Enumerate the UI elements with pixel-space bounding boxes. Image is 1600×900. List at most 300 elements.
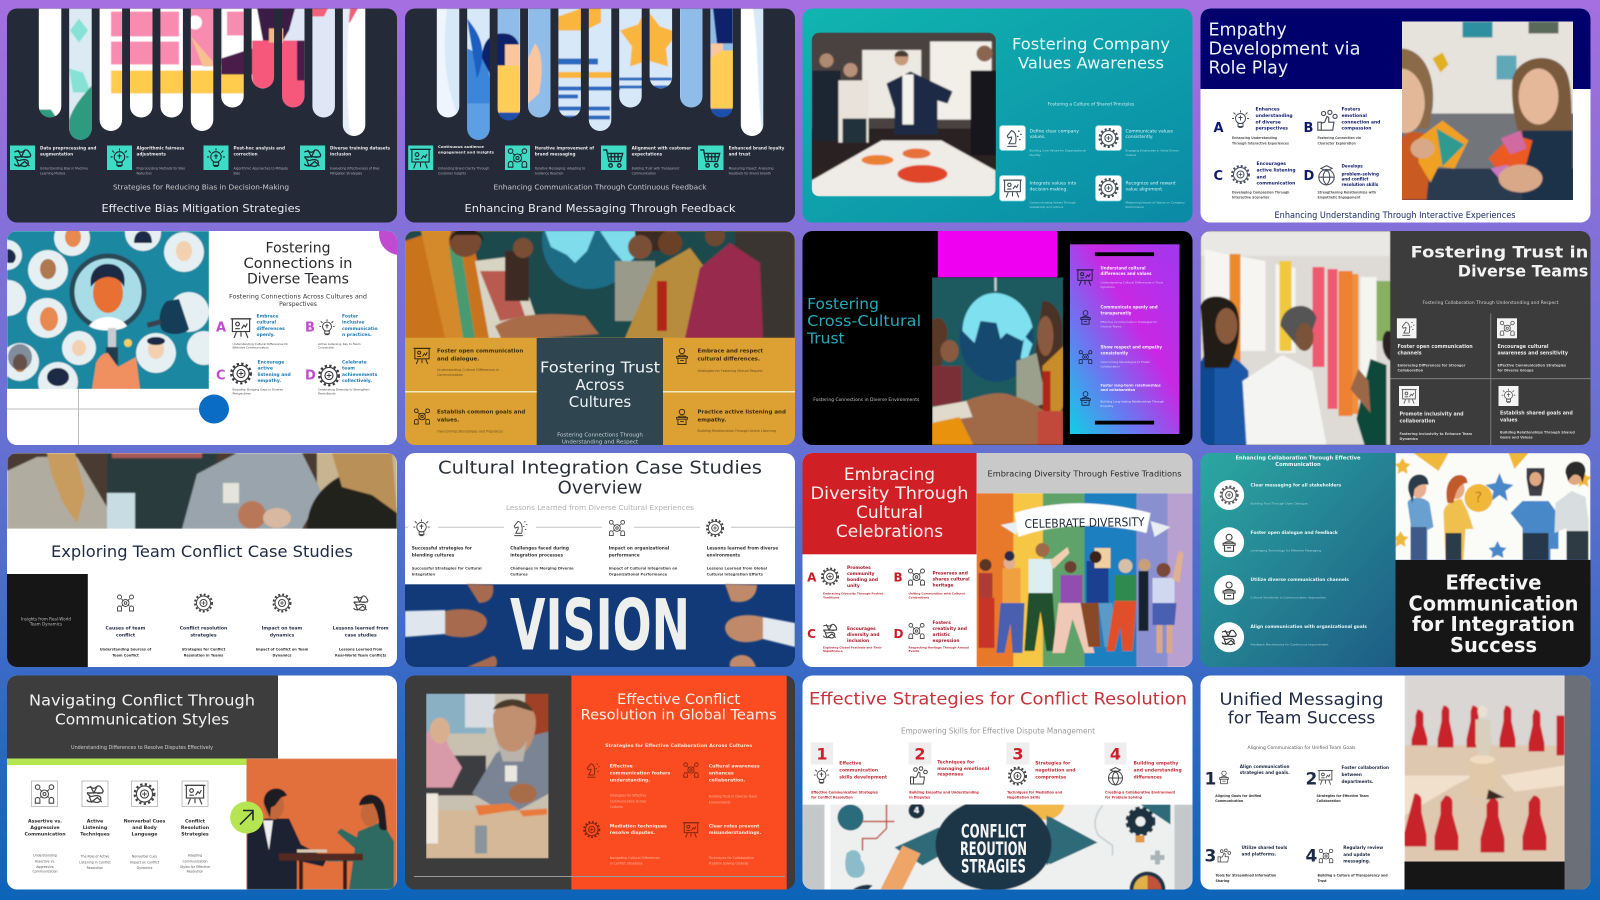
- item: resolution: strategies: [190, 632, 217, 638]
- item C: Empathy: Bridging Gaps in Diverse: [232, 388, 283, 392]
- item: respect differences: cultural differences.: [698, 357, 760, 363]
- item: nonverbal: [124, 781, 165, 870]
- item: algorithmic fairness: Preprocessing Methods for Bias: [136, 166, 185, 170]
- blue dot: [199, 394, 229, 424]
- title: Cultural: [856, 503, 923, 523]
- item: understand differences: Dynamics: [1100, 285, 1115, 289]
- item: brand loyalty: Feedback for Brand Growth: [729, 172, 771, 176]
- item: lessons: Lessons Learned from: [339, 647, 383, 651]
- icon: hub: [684, 763, 698, 777]
- item D: artistic: [932, 632, 950, 638]
- item: data preprocessing: Data preprocessing and: [40, 145, 96, 150]
- item: respect and empathy: Show respect and empathy: [1100, 344, 1162, 349]
- subtitle: Fostering Connections in Diverse Environments: [813, 397, 920, 403]
- item: lessons: Lessons learned from: [333, 625, 389, 631]
- item: diverse training: [300, 145, 391, 176]
- item A: Understanding Cultural Differences for: [232, 342, 289, 346]
- item 1: communication: [839, 767, 878, 773]
- title: Effective Bias Mitigation Strategies: [102, 202, 301, 215]
- item: respect and empathy: Collaboration: [1100, 365, 1120, 369]
- icon: cart: [700, 150, 720, 167]
- item: shared goals: values: [1500, 417, 1518, 423]
- icon: hub: [909, 623, 924, 639]
- title: Connections in: [244, 256, 352, 272]
- item 2: departments.: [1342, 778, 1374, 784]
- item 3: [1006, 742, 1076, 800]
- subtitle: Aligning Communication for Unified Team Goals: [1248, 745, 1356, 751]
- center title block: [537, 338, 663, 445]
- title: Across: [576, 376, 625, 394]
- icon: hand: [1218, 849, 1231, 862]
- item 2: managing emotional: [937, 766, 990, 772]
- item: integrate values: Communicating Values Through: [1030, 200, 1076, 204]
- item C: [1214, 160, 1296, 200]
- item D: Respecting Heritage Through Annual: [908, 646, 969, 650]
- magenta block: [938, 231, 1057, 277]
- icon: gear: [1100, 129, 1117, 147]
- striped illustration: [38, 8, 366, 140]
- item: iterative improvement: Iterative Messaging: Adapting to: [535, 166, 585, 170]
- item: challenges: Cultures: [510, 573, 529, 577]
- item: nonverbal: Nonverbal Cues: [124, 818, 165, 824]
- panel: Enhancing Brand Messaging Through Feedback: [405, 8, 795, 222]
- item: cultural awareness: Encourage cultural: [1498, 344, 1549, 350]
- item: customer expectations: Communication: [632, 172, 656, 176]
- photo: handshake and globe: [405, 231, 795, 338]
- icon: hub: [414, 409, 430, 424]
- item 2: Collaboration: [1316, 799, 1341, 803]
- item: open communication: and dialogue.: [437, 357, 479, 363]
- item: diverse channels: Cultural Sensitivity in Communication Approaches: [1250, 595, 1326, 599]
- icon: podium: [1223, 582, 1235, 599]
- item 4: Trust: [1318, 879, 1327, 883]
- photo: children with origami: [1402, 22, 1573, 200]
- illustration: two people at a table: [246, 758, 397, 890]
- subtitle: Strategies for Reducing Bias in Decision-Making: [113, 184, 289, 192]
- icon: board: [1076, 270, 1094, 286]
- item: data preprocessing: [10, 145, 96, 176]
- item: open communication: Foster open communication: [437, 348, 523, 354]
- item: communicate values: consistently.: [1126, 134, 1153, 140]
- panel: Fostering Connections in Diverse Teams: [0, 213, 421, 445]
- icon: board: [1003, 180, 1022, 197]
- item C: C: [216, 368, 226, 384]
- item 3: negotiation and: [1035, 767, 1076, 773]
- item: integrate values: [1000, 176, 1077, 209]
- item B: B: [305, 320, 315, 336]
- item: dynamics: Impact on team: [262, 625, 303, 631]
- item: audience engagement: Enhancing Brand Clarity Through: [438, 166, 489, 170]
- item: performance: [609, 520, 678, 577]
- orange content block: [571, 676, 787, 890]
- item 2: Foster collaboration: [1342, 764, 1389, 770]
- item: shared goals: Building Relationships Through Shared: [1500, 431, 1575, 435]
- title: Fostering Company: [1012, 34, 1170, 53]
- item A: Through Interactive Experiences: [1232, 142, 1289, 146]
- icon: board: [1318, 771, 1333, 785]
- item: iterative improvement: Iterative improvement of: [535, 145, 594, 150]
- item: recognize alignment: value alignment.: [1126, 186, 1163, 192]
- item: open communication: Communication: [437, 373, 463, 377]
- item D: creativity and: [932, 626, 967, 632]
- item: communicate openly: Diverse Teams: [1100, 325, 1122, 329]
- item: data preprocessing: Learning Models: [40, 172, 66, 176]
- item 4: Building a Culture of Transparency and: [1318, 874, 1388, 878]
- illustration: conflict resolution strategies poster: [802, 804, 1192, 890]
- icon: gear: [1009, 768, 1026, 784]
- item: resolution: Styles for Effective: [180, 865, 210, 869]
- title: Fostering Trust in: [1411, 242, 1588, 261]
- banner: vision with fists: VISION: [510, 584, 690, 666]
- item: clear roles: misunderstandings.: [709, 830, 761, 836]
- item: active listening: Resolution: [87, 866, 103, 870]
- item: resolution: Conflict resolution: [180, 625, 227, 631]
- item D: [1304, 163, 1379, 200]
- item: common goals: Establish common goals and: [437, 409, 525, 415]
- title: for Team Success: [1228, 708, 1375, 728]
- illustration: team conversation: [1396, 453, 1590, 560]
- item: assertive: Aggressive: [36, 865, 54, 869]
- item B: heritage: [932, 582, 953, 588]
- item D: [305, 359, 378, 396]
- item D: Celebrating Diversity to Strengthen: [318, 388, 370, 392]
- item: diverse channels: [1214, 575, 1349, 605]
- title: Resolution in Global Teams: [581, 708, 777, 724]
- title: Navigating Conflict Through: [29, 692, 255, 710]
- icon: globe: [1108, 768, 1122, 785]
- icon: tangle: [14, 150, 31, 166]
- subtitle: Fostering a Culture of Shared Principles: [1048, 102, 1135, 108]
- item: integrate values: Integrate values into: [1030, 180, 1077, 186]
- icon: podium: [1081, 311, 1090, 324]
- item: integrate values: decision-making.: [1030, 186, 1068, 192]
- item: brand loyalty: Measuring Impact: Analyzing: [729, 166, 774, 170]
- illustration: celebrate diversity crowd: [976, 493, 1192, 667]
- title: Success: [1450, 633, 1537, 657]
- icon: gear: [1221, 486, 1238, 504]
- panel: Embracing Diversity Through Cultural Celebrations: [802, 453, 1194, 667]
- icon: podium: [1223, 534, 1235, 551]
- item: assertive: Assertive vs.: [28, 818, 62, 824]
- item: nonverbal: Nonverbal Cues: [132, 854, 157, 858]
- icon: podium: [677, 348, 687, 364]
- icon: tangle: [823, 624, 837, 638]
- item 4: and understanding: [1134, 767, 1182, 773]
- item: open channels: channels: [1398, 350, 1422, 356]
- banner: vision with fists: [405, 584, 795, 667]
- item 2: between: [1342, 772, 1362, 776]
- item: open channels: [1397, 318, 1473, 373]
- gradient list panel: [1070, 244, 1180, 434]
- item: communicate openly: transparently: [1100, 310, 1132, 315]
- item B: B: [1304, 121, 1313, 136]
- item 1: Communication: [1215, 799, 1244, 803]
- item A: perspectives: [1256, 125, 1288, 131]
- item: iterative improvement: Audience Reaction: [535, 172, 564, 176]
- subtitle: Understanding and Respect: [562, 439, 639, 445]
- item: communicate values: Culture: [1126, 153, 1136, 157]
- item A: Enhances: [1256, 106, 1280, 112]
- caption: Enhancing Understanding Through Interactive Experiences: [1274, 210, 1516, 220]
- item: dynamics: Dynamics: [272, 654, 292, 658]
- striped illustration: [436, 8, 764, 140]
- item: respect differences: [677, 348, 763, 373]
- item: diverse training: Mitigation Strategies: [330, 172, 363, 176]
- item: resolution: Strategies for Conflict: [182, 647, 226, 651]
- item: brand loyalty: Enhanced brand loyalty: [729, 145, 785, 150]
- item: open dialogue: Foster open dialogue and feedback: [1250, 530, 1338, 536]
- item B: Celebrations: [908, 595, 929, 599]
- item: understand differences: Understanding Cultural Differences in Trust: [1100, 280, 1164, 284]
- timeline line: [405, 526, 795, 528]
- item C: active: [258, 365, 273, 371]
- icon: cart: [603, 150, 623, 167]
- panel: Exploring Team Conflict Case Studies: [7, 453, 397, 667]
- icon: bulb: [319, 319, 335, 335]
- panel: Fostering Cross-Cultural Trust: [802, 231, 1192, 445]
- item: inclusivity: [1399, 386, 1473, 441]
- item: active listening: Listening: [83, 824, 107, 830]
- item 1: strategies and goals.: [1240, 770, 1290, 774]
- item: iterative improvement: [505, 145, 594, 176]
- item: causes: Causes of team: [106, 625, 146, 631]
- item: cultural awareness: [1497, 318, 1569, 373]
- item: common goals: values.: [437, 417, 459, 423]
- item: algorithmic fairness: [107, 145, 185, 176]
- item 3: Negotiation Skills: [1007, 796, 1040, 800]
- icon: board: [231, 319, 251, 338]
- title block: [7, 676, 278, 758]
- icon: chess: [514, 521, 527, 536]
- title: Fostering: [807, 295, 879, 313]
- title: Fostering Trust: [540, 359, 660, 377]
- item 2: responses: [937, 771, 963, 777]
- item C: Exploring Global Festivals and Their: [823, 646, 882, 650]
- panel: Fostering Company Values Awareness: [802, 8, 1192, 222]
- title: Cross-Cultural: [807, 312, 921, 330]
- item D: expression: [932, 638, 959, 644]
- item: lessons: [707, 520, 778, 577]
- item B: Character Exploration: [1318, 142, 1356, 146]
- icon: hub: [1079, 351, 1092, 363]
- title block: [1396, 560, 1590, 667]
- item 2: in Disputes: [909, 796, 930, 800]
- item: lessons: Real-World Team Conflicts: [335, 654, 386, 658]
- item B: [894, 569, 970, 599]
- item B: Connection: [318, 346, 335, 350]
- subtitle band: Embracing Diversity Through Festive Traditions: [988, 470, 1182, 478]
- item: recognize alignment: Measuring Impact of Values on Company: [1126, 200, 1185, 204]
- item: resolution: Conflict: [185, 818, 206, 824]
- item: assertive: [24, 781, 66, 874]
- item: clear roles: Clear roles prevent: [709, 823, 760, 829]
- item: performance: Organizational Performance: [609, 573, 668, 577]
- item C: C: [807, 627, 816, 641]
- item: mediation: Navigating Cultural Differences: [610, 856, 660, 860]
- item: brand loyalty: [698, 145, 785, 176]
- icon: gear: [274, 594, 290, 612]
- item: open communication: Understanding Cultural Differences in: [437, 368, 499, 372]
- item: recognize alignment: Performance: [1126, 205, 1144, 209]
- item: resolution: Resolution: [181, 824, 209, 830]
- item: active listening: [79, 781, 111, 870]
- item: inclusivity: Fostering Inclusivity to Enhance Team: [1400, 432, 1473, 436]
- item 1: 1: [816, 744, 828, 764]
- poster text: STRAGIES: [961, 856, 1026, 878]
- item: blending cultures: blending cultures: [412, 552, 455, 558]
- item 2: 2: [914, 744, 926, 764]
- item: clear messaging: [1214, 480, 1342, 510]
- photo: red pawns around a figure: [1404, 676, 1564, 862]
- item 4: for Problem Solving: [1105, 796, 1143, 800]
- item: lessons: environments: [707, 552, 740, 558]
- item C: Significance: [823, 649, 843, 653]
- item 3: compromise: [1035, 774, 1066, 780]
- item: define values: Identity: [1030, 153, 1041, 157]
- item: algorithmic fairness: Algorithmic fairness: [136, 145, 185, 150]
- item A: Effective Communication: [232, 346, 269, 350]
- item D: collectively.: [342, 378, 372, 384]
- item B: inclusive: [342, 319, 364, 325]
- item 4: 4: [1110, 744, 1121, 764]
- item B: shares cultural: [932, 576, 970, 582]
- item: open channels: Collaboration: [1398, 369, 1424, 373]
- item: long-term relationships: [1081, 383, 1164, 408]
- item: communicate values: Engaging Employees in Value-Driven: [1126, 148, 1179, 152]
- item C: Perspectives: [232, 392, 251, 396]
- title: Role Play: [1208, 58, 1288, 78]
- item: align goals: Align communication with organizational goals: [1250, 624, 1367, 630]
- divider: [414, 876, 785, 878]
- item: communication: [587, 763, 671, 809]
- icon: gear: [195, 594, 212, 612]
- item D: Develops: [1342, 163, 1363, 168]
- subtitle: Perspectives: [279, 300, 317, 308]
- item: diverse channels: Utilize diverse communication channels: [1250, 577, 1349, 583]
- item: resolution: Resolution: [187, 870, 203, 874]
- panel: Cultural Integration Case Studies Overview: [405, 453, 795, 667]
- title: Effective: [1446, 570, 1542, 594]
- panel: Effective Strategies for Conflict Resolution: [802, 676, 1192, 900]
- item A: unity: [847, 582, 860, 588]
- icon: board: [410, 149, 431, 168]
- item 2: [1306, 764, 1389, 803]
- item: causes: conflict: [116, 632, 136, 638]
- title: Communication: [1408, 591, 1578, 615]
- item: iterative improvement: brand messaging: [535, 151, 575, 156]
- item C: Encourage: [258, 359, 284, 365]
- item: active listening: Building Relationships Through Active Listening: [698, 429, 776, 433]
- item: understand differences: [1076, 265, 1164, 289]
- item A: community: [847, 570, 875, 576]
- item: long-term relationships: Empathy: [1100, 404, 1114, 408]
- item: audience engagement: Customer Insights: [438, 172, 466, 176]
- item: mediation: in Conflict Situations: [610, 862, 643, 866]
- item: lessons: Lessons Learned from Global: [707, 567, 767, 571]
- item: cultural awareness: enhances: [709, 770, 734, 776]
- icon: hub: [1319, 849, 1333, 863]
- item: cultural awareness: Environments: [709, 800, 731, 804]
- illustration: diverse faces and magnifier: [7, 231, 209, 389]
- icon: bulb: [1232, 110, 1249, 128]
- item: causes: [100, 595, 152, 658]
- item: dynamics: Impact of Conflict on Team: [256, 647, 309, 651]
- item: data preprocessing: augmentation: [40, 151, 73, 156]
- item: algorithmic fairness: Reduction: [136, 172, 152, 176]
- title: for Integration: [1412, 612, 1575, 636]
- item: customer expectations: Building Trust with Transparent: [632, 166, 680, 170]
- item C: diversity and: [847, 632, 880, 638]
- item 4: [1104, 742, 1182, 800]
- item: open communication: [413, 348, 523, 377]
- item: performance: performance: [609, 552, 640, 558]
- icon: gears: [319, 366, 339, 385]
- item: define values: Define clear company: [1030, 128, 1079, 134]
- title: Effective Conflict: [617, 692, 740, 708]
- item: algorithmic fairness: adjustments: [136, 151, 166, 156]
- subtitle: Empowering Skills for Effective Dispute Management: [901, 726, 1095, 736]
- item: assertive: Communication: [24, 831, 66, 837]
- item: communicate values: Communicate values: [1126, 128, 1174, 134]
- item: resolution: [180, 594, 227, 658]
- item: brand loyalty: and trust: [729, 151, 750, 156]
- item B: n practices.: [342, 332, 372, 338]
- item D: D: [1304, 169, 1314, 184]
- item: respect differences: Strategies for Fostering Mutual Respect: [698, 369, 763, 373]
- panel: Empathy Development via Role Play: [1200, 8, 1590, 222]
- item D: D: [894, 627, 904, 641]
- title: Diversity Through: [810, 484, 968, 504]
- item A: Promotes: [847, 564, 871, 570]
- item C: [807, 624, 882, 653]
- item: nonverbal: Impact on Conflict: [130, 860, 160, 864]
- item: shared goals: [1498, 386, 1575, 440]
- title: Diverse Teams: [247, 272, 349, 288]
- item A: of diverse: [1256, 119, 1281, 125]
- item: clear messaging: Clear messaging for all stakeholders: [1250, 482, 1342, 488]
- item B: emotional: [1342, 112, 1367, 118]
- title: Exploring Team Conflict Case Studies: [51, 542, 353, 561]
- panel: Unified Messaging for Team Success: [1200, 676, 1590, 890]
- item: inclusivity: Dynamics: [1400, 437, 1418, 441]
- icon: hub: [1500, 321, 1514, 335]
- item: clear roles: Problem Solving Globally: [709, 862, 748, 866]
- panel: Effective Communication for Integration Success: [1200, 453, 1592, 667]
- item: cultural awareness: awareness and sensitivity: [1498, 350, 1569, 356]
- item: communication: Cultures: [610, 805, 623, 809]
- item 1: Effective Communication Strategies: [811, 790, 878, 794]
- title: Development via: [1208, 40, 1360, 60]
- item: diverse training: Diverse training datasets: [330, 145, 391, 150]
- item: respect and empathy: [1079, 344, 1162, 369]
- item: dynamics: [256, 594, 309, 658]
- item 2: Strategies for Effective Team: [1316, 794, 1369, 798]
- item: mediation: [584, 822, 667, 866]
- item 4: Building empathy: [1134, 760, 1178, 766]
- item: active listening: [677, 409, 786, 433]
- item: recognize alignment: Recognize and reward: [1126, 180, 1176, 186]
- item: communication: Communication Across: [610, 800, 647, 804]
- purple corner: [379, 213, 421, 255]
- item: cultural awareness: [684, 763, 760, 804]
- item: post-hoc analysis: Post-hoc analysis and: [234, 145, 285, 150]
- item C: inclusion: [847, 638, 869, 644]
- item: assertive: Communication: [32, 870, 58, 874]
- item: active listening: Techniques: [80, 831, 110, 837]
- item A: understanding: [1256, 112, 1293, 118]
- item D: Team Bonds: [317, 392, 336, 396]
- item: respect and empathy: consistently: [1100, 350, 1128, 355]
